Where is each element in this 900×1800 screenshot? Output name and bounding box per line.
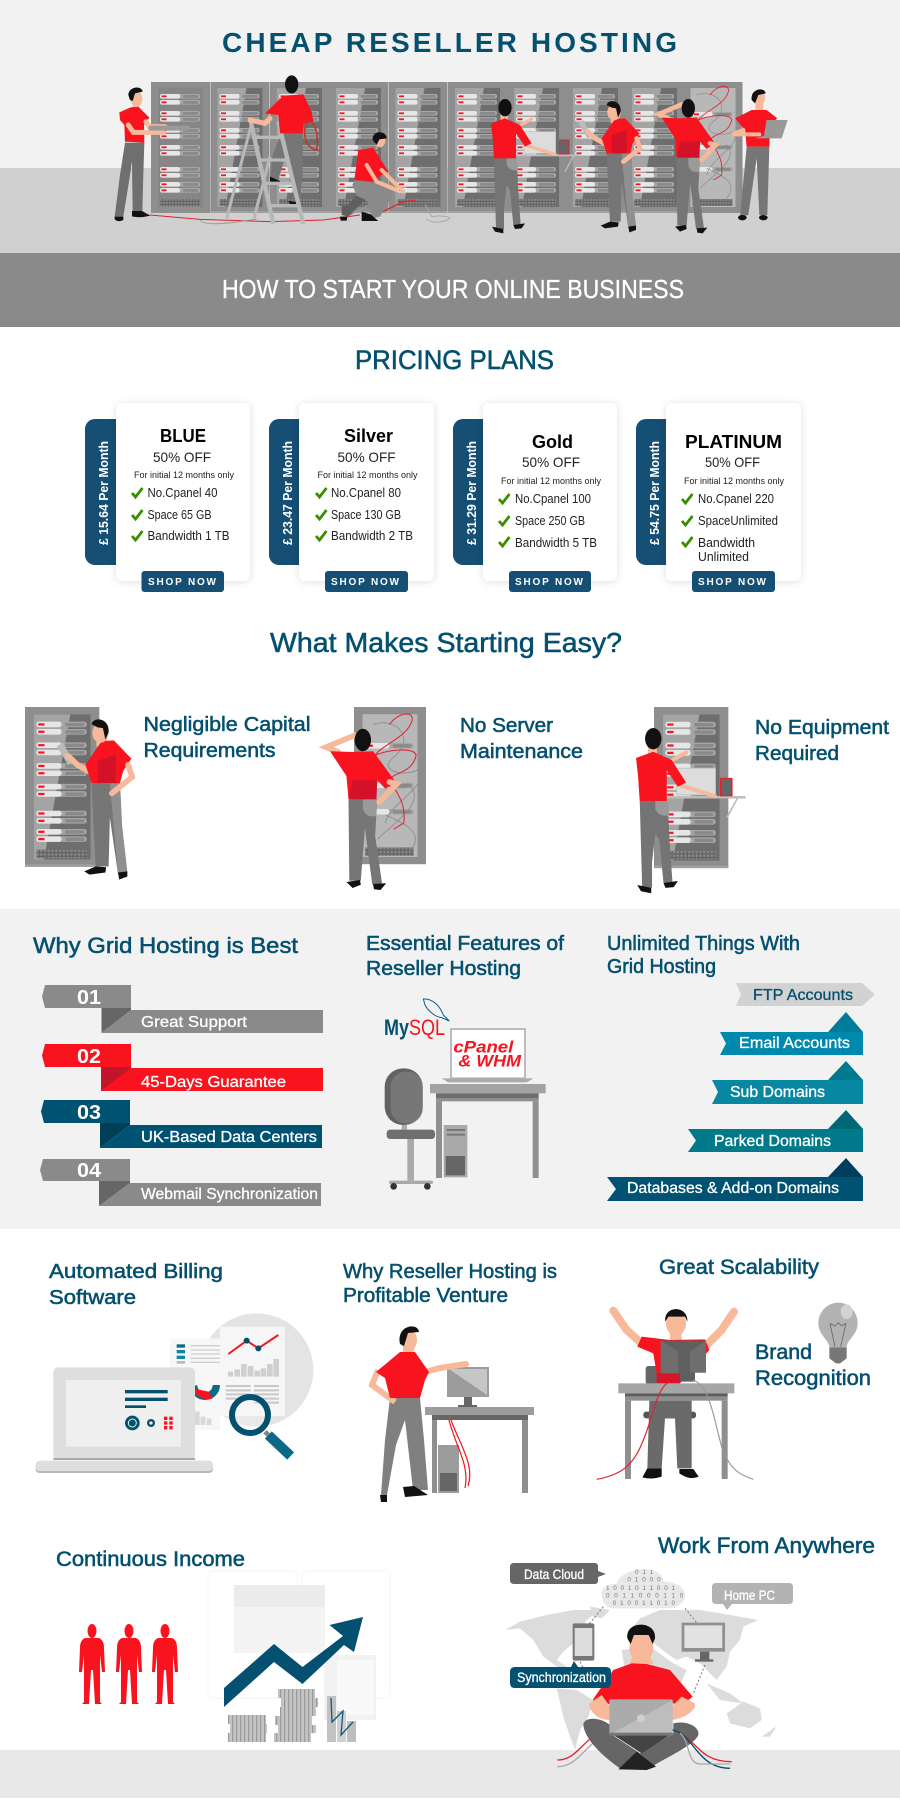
panel: work from anywhere	[505, 1533, 875, 1770]
floor cables	[150, 192, 450, 224]
tag: parked domains	[688, 1110, 863, 1152]
pricing panel: blue: Space 65 GB	[148, 508, 212, 522]
text: negligible capital: Negligible Capital	[144, 714, 310, 736]
icon: desk with computer	[425, 1367, 534, 1493]
heading: Grid Hosting	[607, 955, 716, 978]
icon: technician at shelf	[636, 707, 746, 893]
tag: email accounts: Email Accounts	[739, 1035, 850, 1052]
icon: laptop with cpanel	[442, 1029, 533, 1082]
panel: automated billing software	[36, 1260, 313, 1473]
pricing panel: blue: No.Cpanel 40	[148, 486, 218, 500]
icon: mysql logo	[384, 999, 449, 1040]
text: Recognition	[755, 1367, 871, 1390]
ribbon 03 uk-based data centers: 03	[77, 1102, 101, 1124]
icon: data cloud: 0 1 1	[635, 1569, 654, 1576]
pricing panel: silver: 50% OFF	[338, 449, 396, 465]
text: negligible capital: Requirements	[144, 740, 276, 762]
pricing panel: silver: For initial 12 months only	[318, 470, 418, 481]
text: no equipment required: No Equipment	[755, 717, 889, 739]
heading	[49, 1260, 223, 1309]
label: data cloud	[510, 1563, 606, 1584]
pricing panel: gold: Bandwidth 5 TB	[515, 536, 597, 550]
heading	[366, 932, 564, 980]
tag: parked domains: Parked Domains	[714, 1133, 831, 1150]
tag: email accounts	[720, 1012, 863, 1055]
label: home pc	[712, 1583, 793, 1610]
icon: three people	[79, 1624, 178, 1704]
technician on ladder	[227, 75, 317, 224]
desk scene	[384, 999, 546, 1190]
ribbon 04 webmail synchronization: 04	[77, 1160, 102, 1182]
tag: databases and add-on domains: Databases & Add-on Domains	[627, 1180, 839, 1197]
label: home pc: Home PC	[724, 1587, 775, 1603]
feature: no equipment required	[636, 707, 889, 893]
icon: person with laptop	[557, 1625, 732, 1770]
billing illustration	[36, 1313, 313, 1473]
pricing panel: silver	[269, 403, 434, 592]
pricing panel: platinum: No.Cpanel 220	[698, 492, 774, 506]
icon: laptop with cpanel: & WHM	[458, 1052, 522, 1071]
ribbon 01 great support: 01	[77, 987, 101, 1009]
pricing panel: blue: 50% OFF	[153, 449, 211, 465]
icon: desk	[430, 1084, 546, 1178]
icon: reports and charts	[170, 1313, 313, 1430]
header background	[0, 0, 900, 253]
panel: unlimited things with grid hosting	[607, 932, 875, 1201]
heading: Unlimited Things With	[607, 932, 800, 955]
pricing panel: silver: Space 130 GB	[331, 508, 401, 522]
ribbon 03 uk-based data centers	[41, 1100, 322, 1148]
icon: desktop monitor	[682, 1623, 725, 1662]
pricing panel: blue: SHOP NOW	[148, 577, 217, 588]
tag: sub domains: Sub Domains	[730, 1084, 825, 1101]
pricing panel: blue	[85, 403, 250, 592]
panel: why reseller hosting is profitable venture	[343, 1260, 557, 1502]
heading: Software	[49, 1286, 136, 1309]
pricing panel: silver: Silver	[344, 425, 393, 446]
hero illustration: technicians at server racks	[115, 75, 788, 233]
pricing panel: gold: Space 250 GB	[515, 514, 585, 528]
icon: data cloud: 1 0 0 1 0 1 1 0 0 1	[606, 1585, 675, 1592]
heading: what makes starting easy: What Makes Starting Easy?	[270, 627, 622, 658]
banner heading: HOW TO START YOUR ONLINE BUSINESS	[222, 274, 684, 304]
pricing panel: blue: Bandwidth 1 TB	[148, 529, 230, 543]
icon: businessman	[372, 1326, 466, 1502]
pricing panel: platinum: Bandwidth	[698, 536, 755, 550]
icon: data cloud: 0 1 0 0 1 1 0 1 0	[613, 1600, 675, 1607]
pricing panel: platinum	[636, 403, 801, 592]
text	[755, 1341, 871, 1390]
banner band	[0, 253, 900, 327]
heading: Continuous Income	[56, 1548, 245, 1571]
pricing panel: platinum: PLATINUM	[685, 431, 782, 452]
heading: Reseller Hosting	[366, 957, 521, 980]
ribbon 04 webmail synchronization: Webmail Synchronization	[141, 1186, 318, 1203]
world map	[505, 1607, 777, 1750]
icon: laptop	[36, 1367, 213, 1473]
heading: Great Scalability	[659, 1256, 820, 1279]
heading: Profitable Venture	[343, 1284, 508, 1307]
panel: brand recognition	[755, 1303, 871, 1390]
pricing panel: gold: SHOP NOW	[515, 577, 584, 588]
server racks row	[151, 82, 742, 213]
technician with laptop	[732, 89, 788, 220]
pricing panel: silver: Bandwidth 2 TB	[331, 529, 413, 543]
icon: technician with tangled cables	[326, 707, 426, 890]
icon: data cloud: 0 1 0 0 0	[627, 1577, 661, 1584]
heading: Why Reseller Hosting is	[343, 1260, 557, 1283]
crouching technician	[340, 132, 403, 221]
icon: data cloud: 0 0 1 1 0 0 0 1 1 0	[606, 1592, 684, 1599]
technician with server unit	[115, 88, 190, 221]
pricing panel: silver: No.Cpanel 80	[331, 486, 401, 500]
icon: laptop with cpanel: cPanel	[453, 1037, 514, 1056]
panel: essential features of reseller hosting	[366, 932, 564, 1190]
pricing panel: platinum: £ 54.75 Per Month	[648, 441, 662, 545]
heading	[343, 1260, 557, 1307]
panel: why grid hosting is best	[33, 933, 323, 1206]
panel: continuous income	[56, 1548, 390, 1742]
pricing heading: PRICING PLANS	[355, 345, 554, 375]
pricing panel: gold: No.Cpanel 100	[515, 492, 591, 506]
pricing panel: blue: For initial 12 months only	[134, 470, 234, 481]
icon: computer tower	[444, 1125, 467, 1177]
pricing panel: gold: Gold	[532, 431, 573, 452]
pricing panel: gold	[453, 403, 617, 592]
pricing panel: silver: £ 23.47 Per Month	[281, 441, 295, 545]
scene	[505, 1569, 777, 1770]
background office scene	[208, 1571, 390, 1720]
pricing panel: platinum: For initial 12 months only	[684, 476, 784, 487]
tag: ftp accounts: FTP Accounts	[753, 987, 853, 1004]
icon: coin stacks and bars	[228, 1689, 356, 1742]
icon: smartphone	[573, 1623, 594, 1661]
ribbon 02 45-days guarantee: 45-Days Guarantee	[141, 1074, 286, 1091]
text: Brand	[755, 1341, 812, 1364]
pricing panel: gold: £ 31.29 Per Month	[465, 441, 479, 545]
text: no server maintenance: Maintenance	[460, 741, 583, 763]
panel: great scalability	[597, 1256, 820, 1479]
technician at panel	[491, 99, 580, 233]
pricing panel: blue: BLUE	[160, 425, 206, 446]
arrow: rising income	[224, 1617, 363, 1707]
pricing panel: silver: SHOP NOW	[331, 577, 400, 588]
text: negligible capital	[144, 714, 310, 762]
icon: data cloud	[602, 1569, 685, 1608]
label: synchronization	[510, 1661, 611, 1688]
pricing panel: platinum: 50% OFF	[705, 454, 760, 470]
feature: negligible capital requirements	[25, 707, 310, 879]
ribbon 01 great support: Great Support	[141, 1014, 248, 1031]
icon: technician at rack	[25, 707, 132, 879]
tag: sub domains	[712, 1061, 863, 1104]
right technicians group	[491, 89, 788, 233]
text: no equipment required	[755, 717, 889, 765]
pricing panel: platinum: SHOP NOW	[698, 577, 767, 588]
technician scratching head	[658, 99, 716, 233]
icon: magnifying glass	[232, 1397, 291, 1456]
tag: databases and add-on domains	[607, 1158, 863, 1201]
label: data cloud: Data Cloud	[524, 1566, 584, 1582]
ribbon 02 45-days guarantee: 02	[77, 1046, 101, 1068]
ribbon 02 45-days guarantee	[42, 1044, 323, 1091]
pricing panel: gold: For initial 12 months only	[501, 476, 601, 487]
icon: man celebrating at desk	[597, 1309, 753, 1479]
icon: chair	[385, 1068, 435, 1190]
heading: Work From Anywhere	[658, 1533, 875, 1558]
heading: Automated Billing	[49, 1260, 223, 1283]
ribbon 01 great support	[42, 985, 323, 1033]
ribbon 04 webmail synchronization	[40, 1159, 321, 1206]
ribbon 03 uk-based data centers: UK-Based Data Centers	[141, 1129, 317, 1146]
heading	[607, 932, 800, 978]
pricing panel: platinum: Unlimited	[698, 550, 749, 564]
title: CHEAP RESELLER HOSTING	[222, 27, 677, 58]
text: no server maintenance: No Server	[460, 715, 553, 737]
panel: why grid hosting is best: Why Grid Hosting is Best	[33, 933, 299, 958]
pricing panel: gold: 50% OFF	[522, 454, 580, 470]
left technicians group	[115, 75, 450, 224]
feature: no server maintenance	[326, 707, 583, 890]
tag: ftp accounts	[736, 983, 875, 1006]
label: synchronization: Synchronization	[517, 1669, 606, 1685]
pricing panel: platinum: SpaceUnlimited	[698, 514, 778, 528]
technician with tablet	[578, 101, 640, 232]
text: no server maintenance	[460, 715, 583, 763]
bottom band	[0, 1750, 900, 1798]
text: no equipment required: Required	[755, 743, 839, 765]
panel: grey features section background	[0, 909, 900, 1229]
heading: Essential Features of	[366, 932, 564, 955]
pricing panel: blue: £ 15.64 Per Month	[97, 441, 111, 545]
icon: mysql logo: MySQL	[384, 1015, 445, 1040]
tangled cables on last rack	[690, 86, 735, 198]
icon: light bulb	[818, 1303, 858, 1363]
icon: dotted links	[580, 1607, 705, 1693]
